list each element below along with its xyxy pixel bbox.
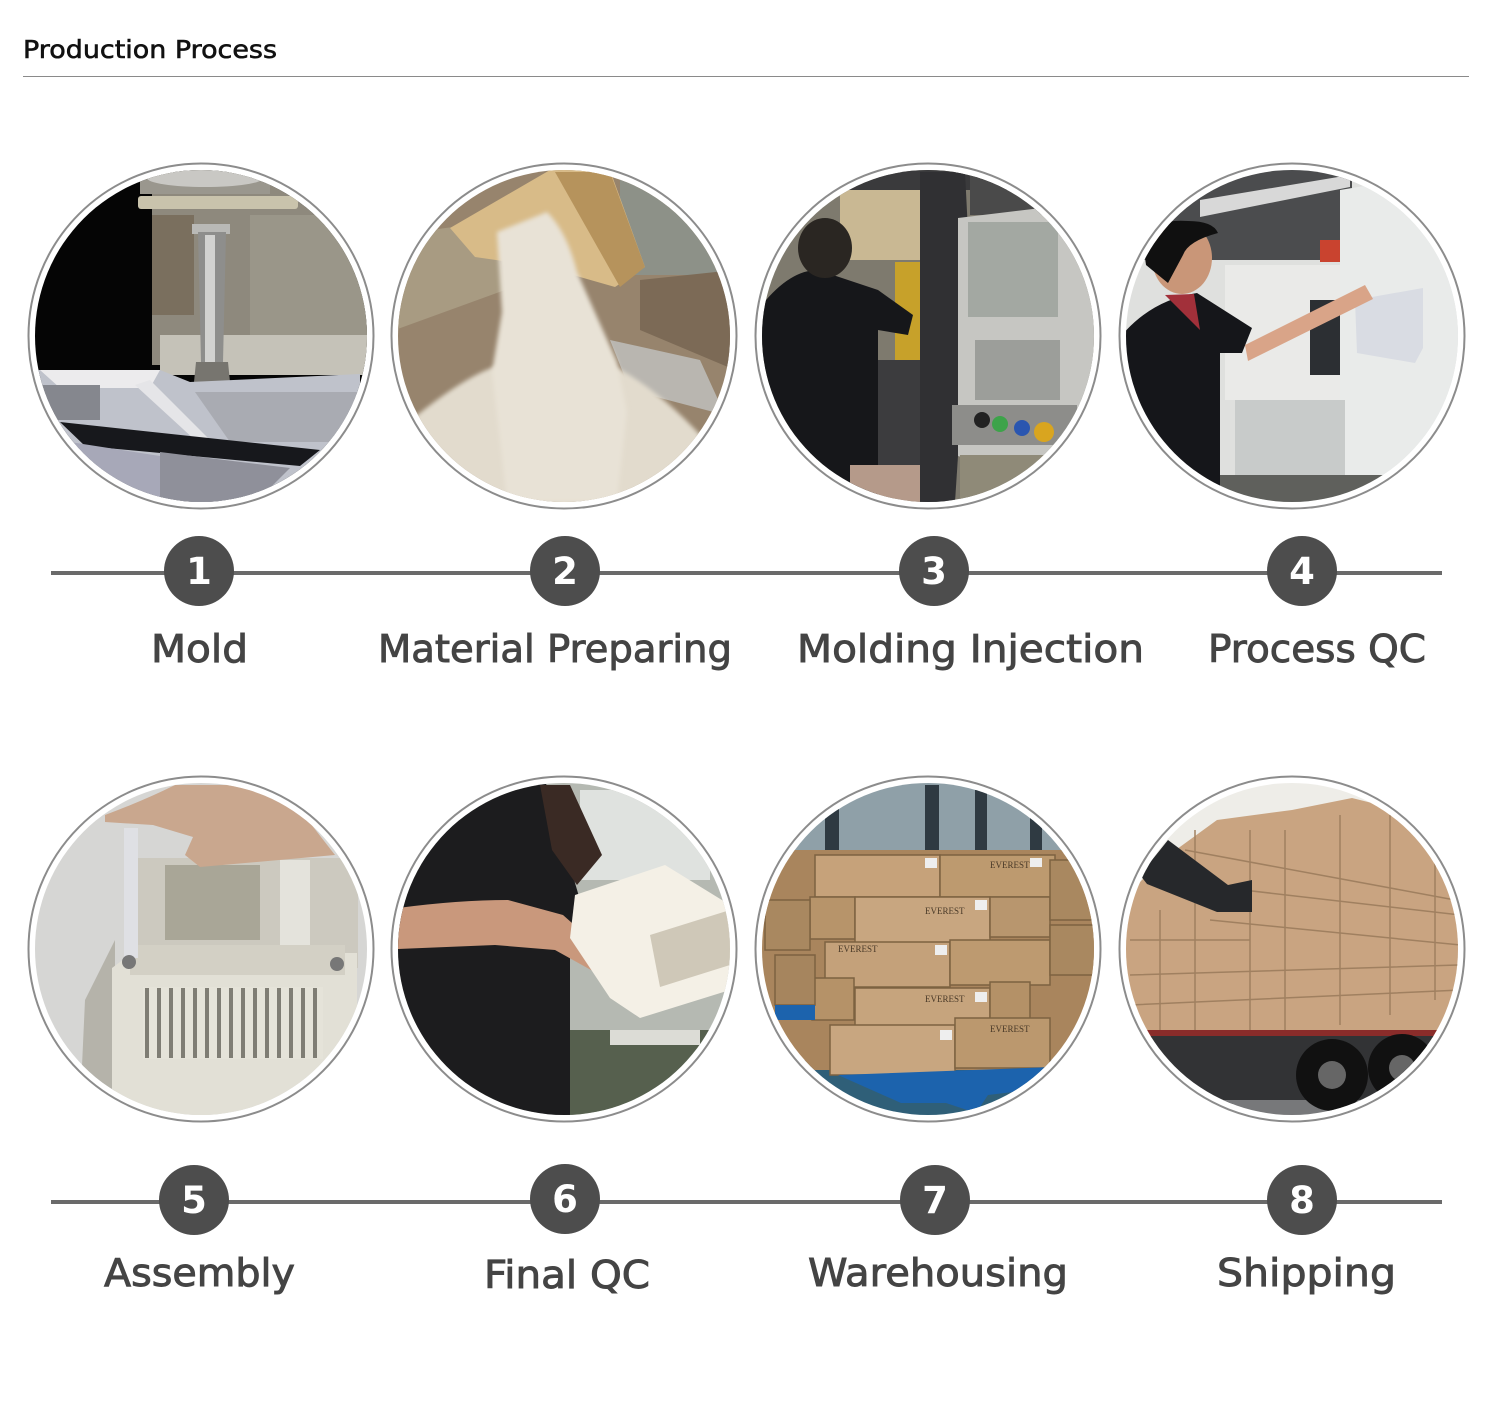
step 8 badge xyxy=(1267,1165,1337,1235)
step 8 badge: 8 xyxy=(1289,1179,1315,1222)
photo 7: warehousing: EVEREST xyxy=(925,906,965,916)
step labels row 2: Shipping xyxy=(1217,1251,1396,1295)
step labels row 2: Assembly xyxy=(104,1251,295,1295)
step labels row 1: Molding Injection xyxy=(797,627,1144,671)
step 1 badge: 1 xyxy=(186,550,212,593)
photo 8: shipping xyxy=(1120,776,1464,1122)
step labels row 2: Warehousing xyxy=(808,1251,1068,1295)
photo 7: warehousing xyxy=(756,776,1100,1122)
step 6 badge xyxy=(530,1164,600,1234)
step 3 badge: 3 xyxy=(921,550,947,593)
photo 7: warehousing: EVEREST xyxy=(838,944,878,954)
photo 2: material pouring xyxy=(392,164,736,510)
step 4 badge: 4 xyxy=(1289,550,1315,593)
photo 3: molding machine operator xyxy=(756,164,1100,510)
step 5 badge: 5 xyxy=(181,1179,207,1222)
photo 7: warehousing: EVEREST xyxy=(925,994,965,1004)
photo 5: assembly xyxy=(28,776,374,1123)
step labels row 2: Final QC xyxy=(484,1253,650,1297)
step 1 badge xyxy=(164,536,234,606)
step 4 badge xyxy=(1267,536,1337,606)
step 2 badge: 2 xyxy=(552,550,578,593)
title: Production Process xyxy=(23,35,277,64)
step 6 badge: 6 xyxy=(552,1178,578,1221)
photo 7: warehousing: EVEREST xyxy=(990,1024,1030,1034)
photo 7: warehousing: EVEREST xyxy=(990,860,1030,870)
step 7 badge xyxy=(900,1165,970,1235)
timeline row 1 xyxy=(51,536,1442,606)
step labels row 1: Process QC xyxy=(1208,627,1426,671)
photo 4: process QC inspector xyxy=(1120,164,1464,513)
step 7 badge: 7 xyxy=(922,1179,948,1222)
step 2 badge xyxy=(530,536,600,606)
step labels row 2 xyxy=(104,1251,1396,1297)
photo 6: final QC xyxy=(392,776,736,1122)
step 3 badge xyxy=(899,536,969,606)
timeline row 2 xyxy=(51,1164,1442,1235)
step labels row 1: Material Preparing xyxy=(378,627,732,671)
step labels row 1: Mold xyxy=(151,627,248,671)
step 5 badge xyxy=(159,1165,229,1235)
step labels row 1 xyxy=(151,627,1426,671)
photo 1: mold machining xyxy=(28,164,374,508)
